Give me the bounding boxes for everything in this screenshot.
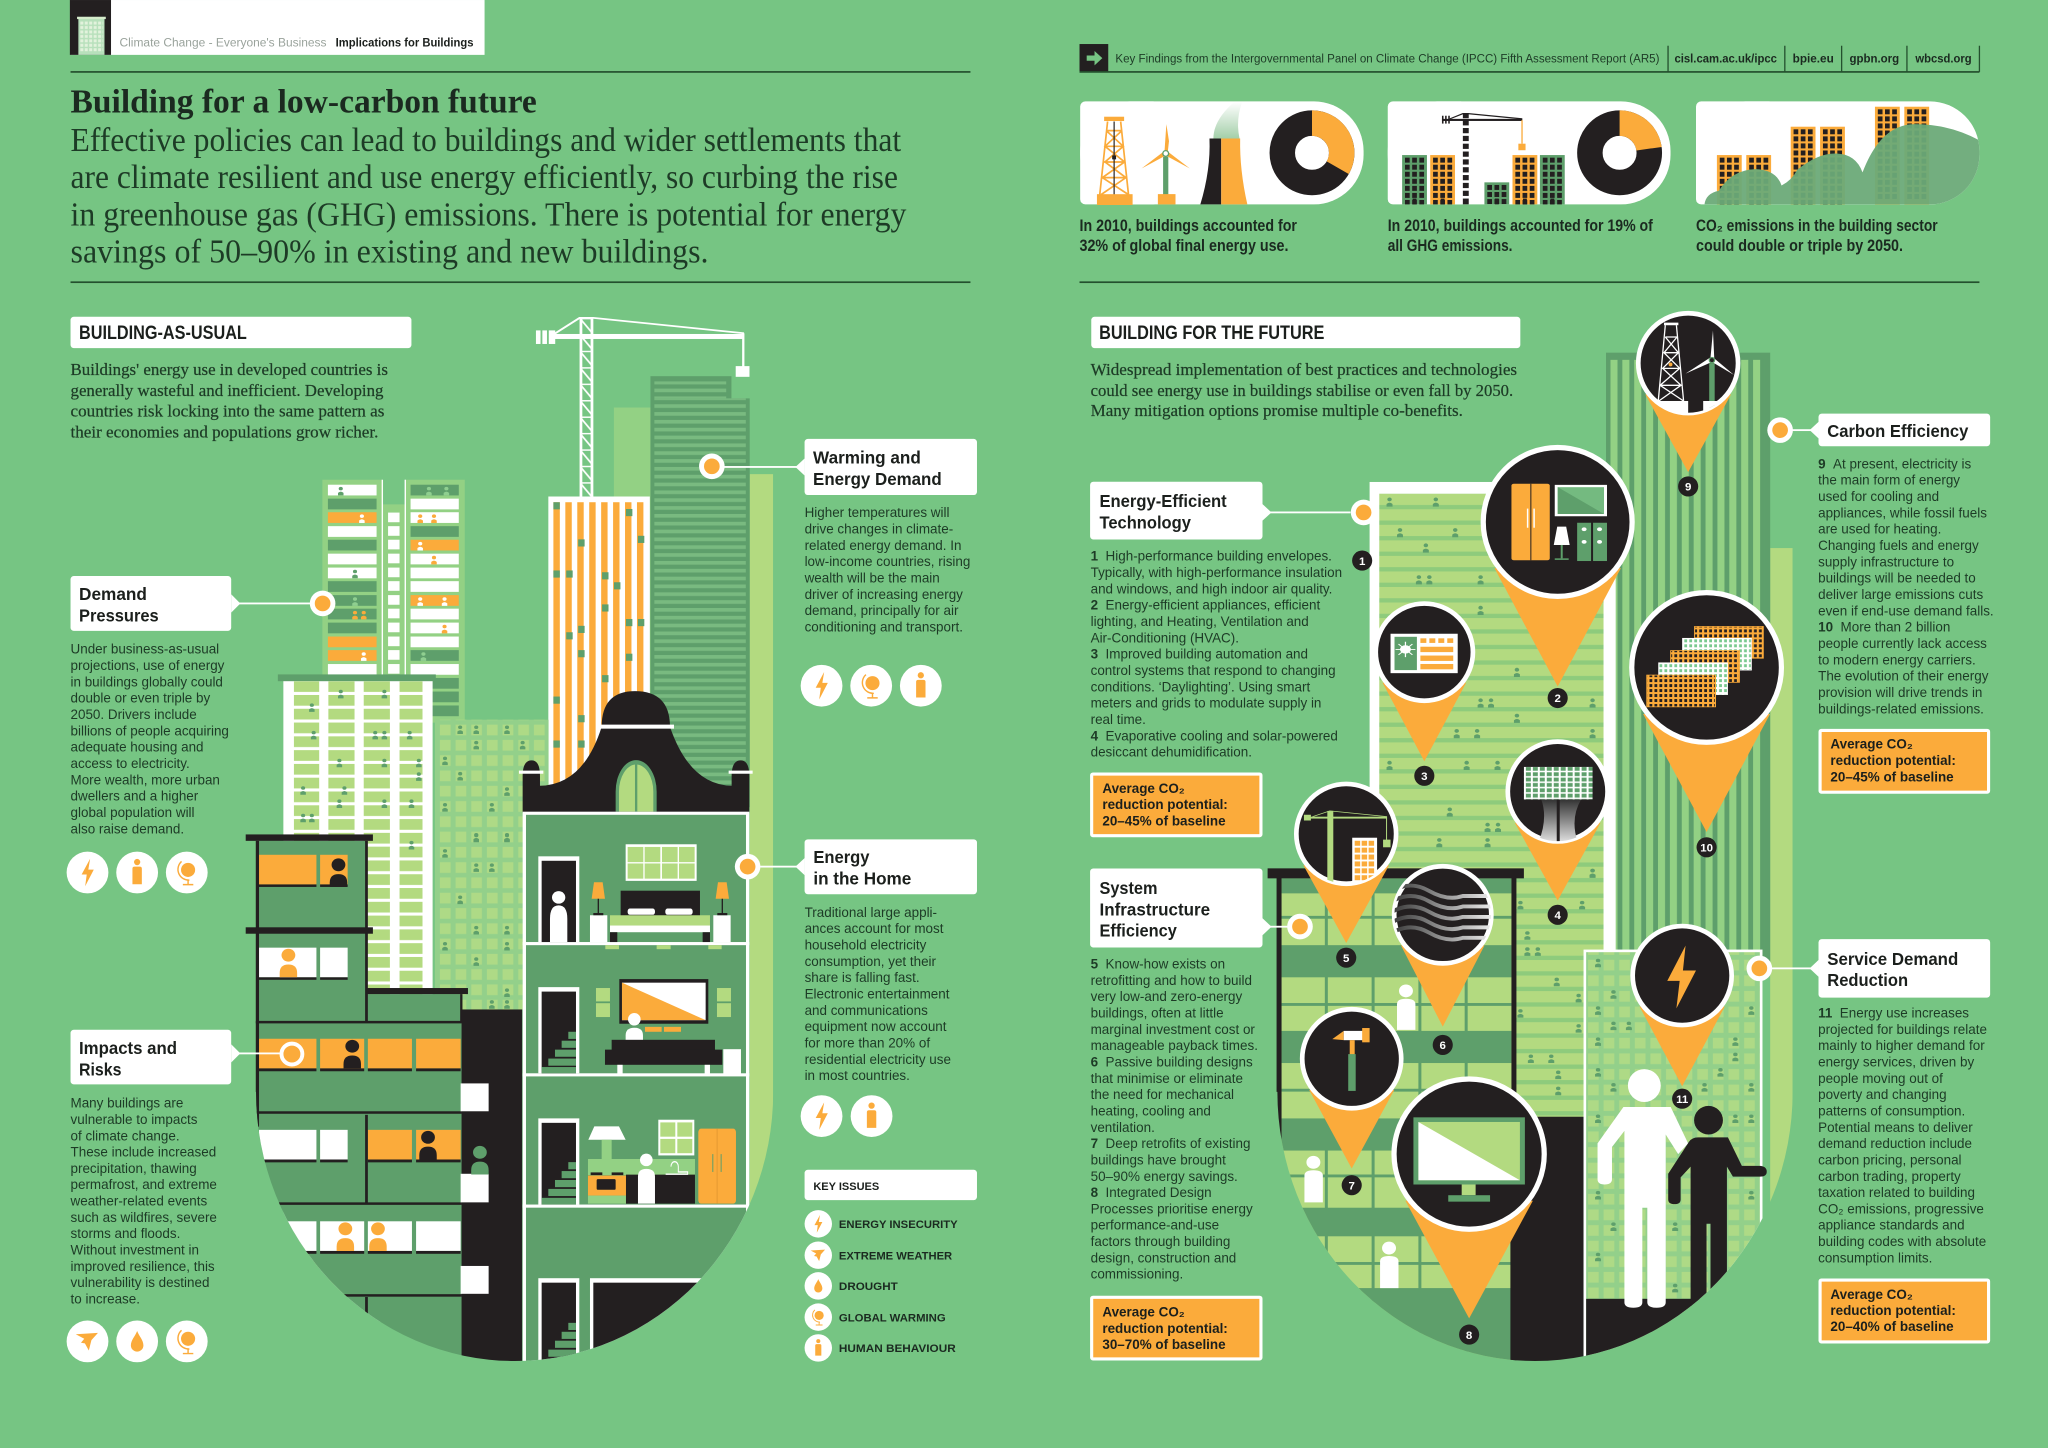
caption: GHG emissions: In 2010, buildings accounted for 19% of (1388, 217, 1653, 235)
text block: carbon efficiency: 10 More than 2 billion (1818, 620, 1950, 635)
text block: energy-efficient technology: Typically, with high-performance insulation (1091, 565, 1342, 580)
panel: CO2 doubling card (1696, 101, 1980, 204)
text block: energy in the home: ances account for most (805, 921, 944, 936)
panel heading: building-as-usual: BUILDING-AS-USUAL (79, 322, 247, 344)
text block: carbon efficiency: Changing fuels and energy (1818, 538, 1979, 553)
text block: system infrastructure efficiency: 8 Integrated Design (1091, 1185, 1212, 1200)
lower floor (538, 1278, 702, 1360)
text block: carbon efficiency (1818, 456, 1994, 716)
marker: system infrastructure efficiency (1287, 914, 1313, 939)
callout: CO2 potential 30-70: 30–70% of baseline (1102, 1337, 1226, 1352)
text block: system infrastructure efficiency: retrofitting and how to build (1091, 973, 1252, 988)
text block: service demand reduction: carbon trading, property (1818, 1169, 1961, 1184)
text block: impacts and risks (70, 1096, 217, 1307)
text block: system infrastructure efficiency: that minimise or eliminate (1091, 1071, 1243, 1086)
bedroom (538, 844, 731, 942)
text block: carbon efficiency: deliver large emissions cuts (1818, 587, 1983, 602)
legend: key issues: EXTREME WEATHER (839, 1250, 952, 1262)
badge: 8: 8 (1466, 1330, 1473, 1342)
text block: demand pressures (71, 642, 229, 836)
text block: service demand reduction: carbon pricing, personal (1818, 1152, 1962, 1167)
marker: carbon efficiency (1767, 417, 1793, 443)
light band building (1770, 548, 1792, 1202)
text block: service demand reduction: energy services, driven by (1818, 1054, 1974, 1069)
text block: energy-efficient technology: meters and grids to modulate supply in (1091, 696, 1321, 711)
text block: impacts and risks: Many buildings are (71, 1096, 183, 1111)
text block: building-as-usual intro (71, 360, 388, 442)
pin 5: low-energy construction (1296, 784, 1396, 943)
text block: system infrastructure efficiency: design, construction and (1091, 1250, 1236, 1265)
text block: demand pressures: projections, use of energy (71, 658, 225, 673)
badge: 10: 10 (1700, 842, 1713, 854)
icon: rising buildings under emission clouds (1704, 106, 1980, 204)
text block: impacts and risks: vulnerability is destined (71, 1275, 209, 1290)
icons: impacts and risks issues (67, 1321, 208, 1362)
text block: impacts and risks: weather-related events (70, 1194, 208, 1209)
callout: impacts and risks: Impacts and (79, 1038, 177, 1058)
callout: service demand reduction: Service Demand (1827, 949, 1958, 969)
caption: GHG emissions: all GHG emissions. (1388, 237, 1512, 255)
panel heading: building for the future: BUILDING FOR THE FUTURE (1099, 322, 1324, 344)
callout: CO2 potential 20-45: reduction potential: (1102, 797, 1228, 812)
callout: energy in the home: in the Home (813, 868, 911, 888)
badge: 7 (1342, 1175, 1362, 1195)
text block: system infrastructure efficiency: commissioning. (1091, 1267, 1183, 1282)
text block: demand pressures: global population will (71, 805, 195, 820)
callout: service demand reduction: Reduction (1827, 970, 1908, 990)
text block: service demand reduction: projected for buildings relate (1818, 1022, 1987, 1037)
text block: energy-efficient technology (1091, 549, 1342, 760)
text block: demand pressures: in buildings globally could (71, 674, 223, 689)
callout: CO2 potential 30-70: Average CO₂ (1102, 1305, 1185, 1320)
badge: 10 (1697, 837, 1717, 857)
callout: CO2 potential 20-45 right: Average CO₂ (1830, 736, 1913, 751)
text block: impacts and risks: permafrost, and extreme (71, 1177, 217, 1192)
black core tower (1510, 1117, 1584, 1378)
text block: energy-efficient technology: desiccant dehumidification. (1091, 745, 1252, 760)
caption: energy use: 32% of global final energy use. (1080, 237, 1288, 255)
text block: building-as-usual intro: countries risk locking into the same pattern as (71, 402, 384, 421)
text block: system infrastructure efficiency: 5 Know-how exists on (1091, 957, 1225, 972)
text block: system infrastructure efficiency: 50–90% energy savings. (1091, 1169, 1238, 1184)
text block: energy-efficient technology: 2 Energy-efficient appliances, efficient (1091, 598, 1320, 613)
callout: demand pressures (71, 576, 335, 631)
top navigation: right page: gpbn.org (1849, 51, 1899, 65)
background light band building (750, 474, 773, 1204)
house cutaway (519, 691, 753, 1368)
text block: system infrastructure efficiency: marginal investment cost or (1091, 1022, 1255, 1037)
panel heading: building for the future (1091, 317, 1520, 348)
callout: CO2 potential 30-70 (1092, 1297, 1261, 1359)
text block: system infrastructure efficiency: very low-and zero-energy (1091, 989, 1243, 1004)
badge: 1: 1 (1359, 556, 1366, 568)
house structure (523, 812, 749, 1368)
text block: service demand reduction: CO₂ emissions, progressive (1818, 1201, 1984, 1216)
text block: warming and energy demand (804, 505, 970, 635)
text block: carbon efficiency: used for cooling and (1818, 489, 1939, 504)
twin towers (322, 480, 465, 723)
text block: system infrastructure efficiency: buildings have brought (1091, 1152, 1226, 1167)
text block: building-as-usual intro: Buildings' energy use in developed countries is (71, 360, 388, 379)
text block: energy in the home: and communications (805, 1003, 928, 1018)
badge: 2 (1548, 688, 1568, 708)
legend: key issues: GLOBAL WARMING (839, 1312, 946, 1324)
panel heading: building-as-usual (71, 317, 411, 348)
intro paragraph: Effective policies can lead to buildings and wider settlements that (71, 122, 902, 159)
intro paragraph (71, 122, 907, 270)
legend: key issues: DROUGHT (839, 1281, 898, 1293)
intro paragraph: savings of 50–90% in existing and new buildings. (71, 233, 709, 270)
text block: warming and energy demand: conditioning and transport. (805, 620, 963, 635)
text block: building-as-usual intro: generally wasteful and inefficient. Developing (71, 381, 384, 400)
text block: building for the future intro: Widespread implementation of best practices and technologies (1091, 360, 1517, 379)
illustration: future city (1268, 353, 1793, 1390)
text block: demand pressures: Under business-as-usual (71, 642, 219, 657)
callout: warming and energy demand: Warming and (813, 448, 921, 468)
icon: crane and mini buildings (1402, 113, 1565, 204)
pin 8: integrated design monitor (1394, 1079, 1544, 1318)
text block: impacts and risks: vulnerable to impacts (71, 1112, 198, 1127)
header tab: left page (70, 0, 485, 55)
donut chart: 19 percent (1590, 110, 1662, 183)
badge: 11: 11 (1676, 1094, 1689, 1106)
text block: system infrastructure efficiency: heating, cooling and (1091, 1103, 1211, 1118)
text block: energy-efficient technology: and windows, and high indoor air quality. (1091, 581, 1332, 596)
text block: service demand reduction: demand reduction include (1818, 1136, 1972, 1151)
text block: service demand reduction: Potential means to deliver (1818, 1120, 1973, 1135)
text block: carbon efficiency: to modern energy carriers. (1818, 652, 1976, 667)
text block: impacts and risks: of climate change. (71, 1128, 180, 1143)
callout: energy in the home (735, 839, 977, 894)
text block: building for the future intro: Many mitigation options promise multiple co-benefits. (1091, 401, 1463, 420)
legend: key issues: HUMAN BEHAVIOUR (839, 1343, 956, 1355)
text block: carbon efficiency: people currently lack access (1818, 636, 1987, 651)
white column building (278, 674, 436, 1322)
badge: 5: 5 (1343, 953, 1350, 965)
text block: system infrastructure efficiency: buildings, often at little (1091, 1005, 1224, 1020)
callout: impacts and risks (71, 1030, 302, 1084)
callout: CO2 potential 20-45 right: 20–45% of baseline (1830, 769, 1954, 784)
callout: energy-efficient technology: Energy-Efficient (1099, 491, 1227, 511)
text block: energy-efficient technology: Air-Conditioning (HVAC). (1091, 630, 1239, 645)
caption: CO2 doubling: could double or triple by 2050. (1696, 237, 1903, 255)
text block: warming and energy demand: drive changes in climate- (805, 522, 953, 537)
callout: energy in the home: Energy (813, 847, 870, 867)
pin 3: building automation (1376, 604, 1473, 761)
text block: warming and energy demand: demand, principally for air (805, 603, 959, 618)
text block: energy in the home (805, 905, 951, 1083)
badge: 6: 6 (1440, 1040, 1446, 1052)
pin 9: fuel switch (1638, 313, 1738, 472)
callout: CO2 potential 20-40: 20–40% of baseline (1830, 1319, 1954, 1334)
badge: 9: 9 (1685, 482, 1691, 494)
callout: CO2 potential 20-40: Average CO₂ (1830, 1287, 1913, 1302)
icons: energy in the home issues (801, 1095, 892, 1137)
text block: system infrastructure efficiency (1091, 957, 1258, 1282)
text block: system infrastructure efficiency: factors through building (1091, 1234, 1230, 1249)
text block: service demand reduction: patterns of consumption. (1818, 1103, 1965, 1118)
text block: carbon efficiency: buildings-related emissions. (1818, 701, 1984, 716)
text block: building for the future intro: could see energy use in buildings stabilise or even fall by 2050. (1091, 381, 1513, 400)
callout: energy-efficient technology (1090, 482, 1351, 539)
text block: energy in the home: consumption, yet their (805, 954, 937, 969)
callout: demand pressures: Demand (79, 584, 147, 604)
badge: 4: 4 (1554, 910, 1561, 922)
header tab: left page: Climate Change - Everyone's Business (120, 35, 327, 49)
text block: system infrastructure efficiency: 6 Passive building designs (1091, 1054, 1253, 1069)
text block: energy-efficient technology: conditions. ‘Daylighting’. Using smart (1091, 679, 1310, 694)
kitchen (538, 1118, 736, 1205)
background pale tower (614, 408, 650, 694)
people: adult and child (1598, 1069, 1767, 1308)
icons: warming issues (801, 665, 942, 707)
text block: service demand reduction: consumption limits. (1818, 1250, 1932, 1265)
horizontal striped tower (1370, 482, 1616, 1117)
text block: energy-efficient technology: real time. (1091, 712, 1146, 727)
illustration: business-as-usual city (246, 318, 773, 1388)
text block: carbon efficiency: supply infrastructure to (1818, 554, 1954, 569)
intro paragraph: are climate resilient and use energy efficiently, so curbing the rise (71, 159, 898, 196)
callout: impacts and risks: Risks (79, 1060, 122, 1080)
text block: impacts and risks: precipitation, thawing (71, 1161, 197, 1176)
text block: warming and energy demand: driver of increasing energy (805, 587, 963, 602)
text block: energy in the home: share is falling fast. (805, 970, 920, 985)
text block: system infrastructure efficiency: Processes prioritise energy (1091, 1201, 1253, 1216)
text block: carbon efficiency: even if end-use demand falls. (1818, 603, 1994, 618)
badge: 11 (1672, 1089, 1692, 1109)
caption: GHG emissions (1388, 217, 1653, 255)
text block: energy-efficient technology: 1 High-performance building envelopes. (1091, 549, 1332, 564)
intro paragraph: in greenhouse gas (GHG) emissions. There is potential for energy (71, 196, 907, 233)
text block: service demand reduction: mainly to higher demand for (1818, 1038, 1985, 1053)
callout: system infrastructure efficiency: Infrastructure (1099, 900, 1210, 920)
marker: service demand reduction (1747, 956, 1772, 981)
text block: demand pressures: access to electricity. (71, 756, 190, 771)
living room (538, 979, 741, 1074)
caption: CO2 doubling: CO₂ emissions in the building sector (1696, 217, 1938, 235)
text block: demand pressures: double or even triple by (71, 691, 211, 706)
text block: energy-efficient technology: 4 Evaporative cooling and solar-powered (1091, 728, 1338, 743)
pin 2: efficient appliances (1483, 447, 1632, 687)
top navigation: right page: Key Findings from the Intergovernmental Panel on Climate Change (IPCC) Fifth Assessment Report (AR5) (1115, 51, 1659, 65)
text block: service demand reduction: taxation related to building (1818, 1185, 1975, 1200)
striped tall tower (1606, 353, 1770, 967)
panel: GHG emissions card (1388, 101, 1670, 204)
text block: service demand reduction: 11 Energy use increases (1818, 1005, 1969, 1020)
pin 10: energy panels (1632, 593, 1781, 832)
donut chart: 32 percent (1282, 110, 1354, 183)
text block: energy in the home: in most countries. (805, 1068, 910, 1083)
text block: service demand reduction: poverty and changing (1818, 1087, 1947, 1102)
text block: carbon efficiency: provision will drive trends in (1818, 685, 1982, 700)
text block: energy in the home: Electronic entertainment (805, 987, 950, 1002)
front building with windows (1584, 950, 1762, 1390)
callout: warming and energy demand: Energy Demand (813, 469, 942, 489)
badge: 4 (1548, 905, 1568, 925)
icon: wind turbine (1142, 124, 1190, 204)
text block: energy in the home: residential electricity use (805, 1052, 951, 1067)
text block: energy in the home: for more than 20% of (805, 1036, 930, 1051)
text block: impacts and risks: such as wildfires, severe (71, 1210, 217, 1225)
callout: carbon efficiency (1792, 414, 1990, 446)
text block: impacts and risks: to increase. (71, 1292, 140, 1307)
callout: system infrastructure efficiency (1090, 868, 1289, 947)
text block: building for the future intro (1091, 360, 1517, 420)
text block: carbon efficiency: appliances, while fossil fuels (1818, 505, 1987, 520)
badge: 1 (1352, 551, 1372, 571)
callout: CO2 potential 20-40 (1820, 1280, 1989, 1342)
callout: CO2 potential 20-45: Average CO₂ (1102, 781, 1185, 796)
text block: impacts and risks: improved resilience, this (71, 1259, 215, 1274)
badge: 6 (1433, 1035, 1453, 1055)
text block: energy in the home: Traditional large appli- (805, 905, 937, 920)
text block: demand pressures: adequate housing and (71, 740, 204, 755)
badge: 2: 2 (1554, 693, 1561, 705)
header tab: left page: Implications for Buildings (336, 35, 474, 49)
icon: oil derrick (1098, 118, 1132, 204)
callout: system infrastructure efficiency: System (1099, 878, 1157, 898)
text block: system infrastructure efficiency: performance-and-use (1091, 1218, 1219, 1233)
callout: CO2 potential 20-45 right: reduction potential: (1830, 753, 1956, 768)
icon: cooling tower (1200, 102, 1247, 204)
text block: carbon efficiency: The evolution of their energy (1818, 669, 1989, 684)
text block: demand pressures: More wealth, more urban (71, 772, 220, 787)
badge: 9 (1678, 476, 1698, 496)
dark striped tower (650, 376, 750, 807)
apartment block (246, 834, 522, 1381)
low-rise retrofit building (1268, 868, 1524, 1381)
text block: service demand reduction: appliance standards and (1818, 1218, 1965, 1233)
text block: impacts and risks: These include increased (71, 1145, 216, 1160)
badge: 3 (1414, 766, 1434, 786)
callout: CO2 potential 20-45 right (1820, 730, 1989, 792)
text block: system infrastructure efficiency: ventilation. (1091, 1120, 1155, 1135)
text block: system infrastructure efficiency: 7 Deep retrofits of existing (1091, 1136, 1250, 1151)
text block: carbon efficiency: the main form of energy (1818, 473, 1960, 488)
callout: CO2 potential 20-45 (1092, 774, 1261, 836)
callout: carbon efficiency: Carbon Efficiency (1827, 421, 1968, 441)
text block: carbon efficiency: 9 At present, electricity is (1818, 456, 1972, 471)
legend: key issues: KEY ISSUES (813, 1181, 880, 1193)
text block: energy-efficient technology: lighting, and Heating, Ventilation and (1091, 614, 1309, 629)
text block: service demand reduction (1818, 1005, 1987, 1265)
text block: warming and energy demand: related energy demand. In (805, 538, 961, 553)
text block: energy in the home: household electricity (805, 938, 927, 953)
text block: impacts and risks: Without investment in (71, 1243, 199, 1258)
text block: service demand reduction: people moving out of (1818, 1071, 1943, 1086)
pin 6: passive design waves (1392, 866, 1496, 1027)
text block: system infrastructure efficiency: manageable payback times. (1091, 1038, 1258, 1053)
text block: energy-efficient technology: 3 Improved building automation and (1091, 647, 1308, 662)
text block: carbon efficiency: buildings will be needed to (1818, 571, 1976, 586)
text block: demand pressures: 2050. Drivers include (71, 707, 197, 722)
text block: carbon efficiency: are used for heating. (1818, 522, 1941, 537)
top navigation: right page (1080, 44, 1980, 73)
callout: demand pressures: Pressures (79, 606, 159, 626)
badge: 5 (1336, 948, 1356, 968)
text block: warming and energy demand: Higher temperatures will (805, 505, 949, 520)
text block: demand pressures: also raise demand. (71, 821, 184, 836)
orange striped tower (548, 497, 650, 818)
pin 4: solar cooling (1508, 742, 1608, 900)
callout: CO2 potential 20-45: 20–45% of baseline (1102, 813, 1226, 828)
legend: key issues (805, 1170, 977, 1362)
marker: energy-efficient technology (1351, 500, 1376, 525)
legend: key issues: ENERGY INSECURITY (839, 1219, 958, 1231)
icons: demand pressures issues (67, 852, 208, 893)
text block: warming and energy demand: low-income countries, rising (805, 554, 970, 569)
badge: 7: 7 (1349, 1180, 1355, 1192)
text block: energy-efficient technology: control systems that respond to changing (1091, 663, 1336, 678)
caption: energy use (1080, 217, 1298, 255)
roof with dome (519, 691, 753, 813)
callout: CO2 potential 30-70: reduction potential: (1102, 1321, 1228, 1336)
text block: system infrastructure efficiency: the need for mechanical (1091, 1087, 1234, 1102)
badge: 8 (1459, 1325, 1479, 1345)
crane (536, 318, 749, 497)
pin 7: retrofit hammer (1302, 1009, 1401, 1168)
top navigation: right page: bpie.eu (1793, 51, 1834, 65)
callout: system infrastructure efficiency: Efficiency (1099, 921, 1177, 941)
text block: demand pressures: dwellers and a higher (71, 789, 199, 804)
badge: 3: 3 (1421, 771, 1428, 783)
callout: energy-efficient technology: Technology (1099, 512, 1191, 532)
text block: demand pressures: billions of people acquiring (71, 723, 229, 738)
caption: energy use: In 2010, buildings accounted for (1080, 217, 1298, 235)
text block: warming and energy demand: wealth will be the main (804, 571, 940, 586)
caption: CO2 doubling (1696, 217, 1938, 255)
pin 11: demand bolt (1633, 926, 1732, 1086)
text block: service demand reduction: building codes with absolute (1818, 1234, 1986, 1249)
panel: energy use card (1080, 101, 1364, 204)
top navigation: right page: cisl.cam.ac.uk/ipcc (1674, 51, 1777, 65)
callout: warming and energy demand (699, 439, 977, 495)
top navigation: right page: wbcsd.org (1914, 51, 1972, 65)
text block: impacts and risks: storms and floods. (71, 1226, 180, 1241)
text block: energy in the home: equipment now account (805, 1019, 947, 1034)
black stair tower (461, 1009, 522, 1381)
callout: service demand reduction (1771, 939, 1990, 998)
text block: building-as-usual intro: their economies and populations grow richer. (71, 423, 378, 442)
title: Building for a low-carbon future (71, 83, 537, 120)
window-grid building (435, 720, 549, 1010)
callout: CO2 potential 20-40: reduction potential: (1830, 1303, 1956, 1318)
